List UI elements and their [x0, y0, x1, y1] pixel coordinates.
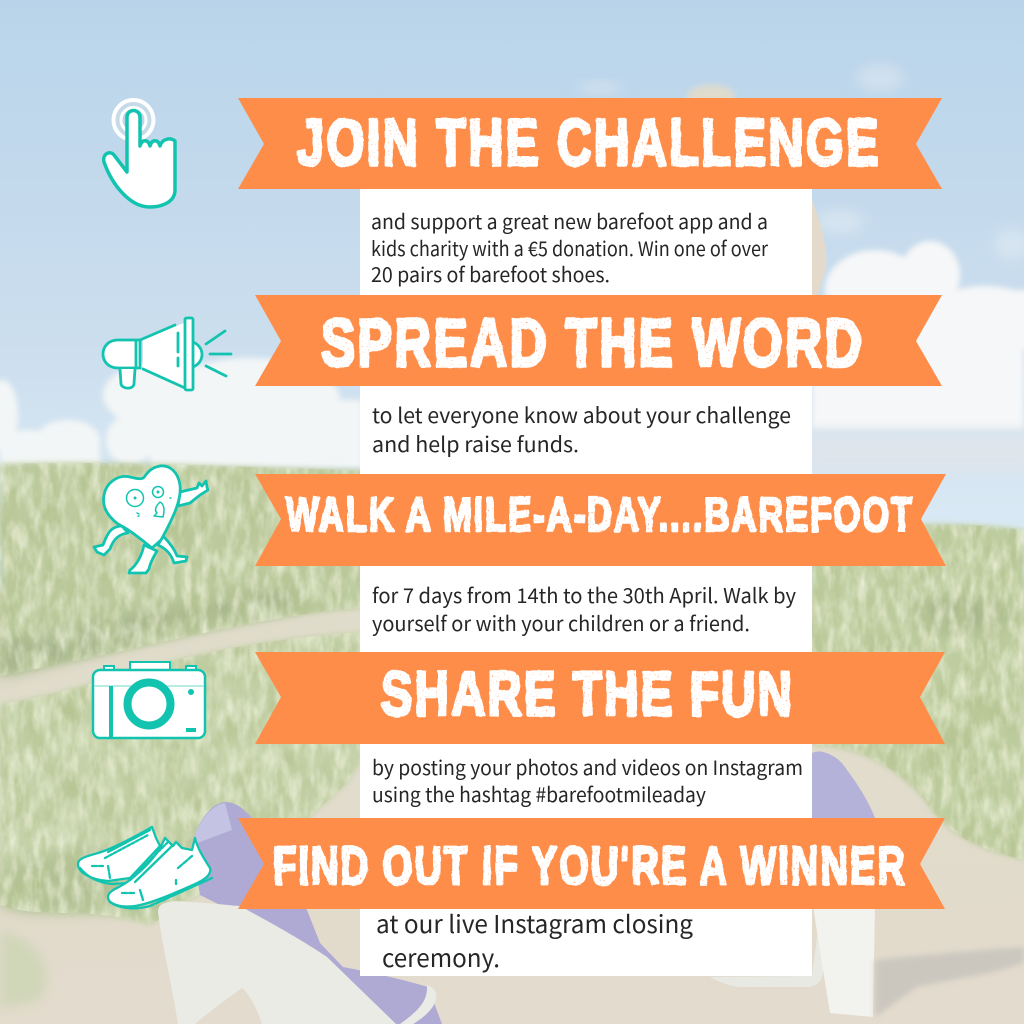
grass: lower left slope — [0, 632, 362, 925]
text: join description: and support a great new barefoot app and a — [371, 206, 768, 235]
icon: camera — [93, 662, 205, 738]
step 3: walk a mile a day — [94, 466, 946, 637]
text: winner description: at our live Instagram closing — [376, 906, 693, 941]
clouds — [0, 64, 1024, 472]
banner: walk a mile a day barefoot — [255, 474, 946, 566]
step 5: find out if you're a winner — [78, 818, 945, 975]
icon: sneakers — [78, 827, 212, 908]
icon: pointing hand — [104, 100, 175, 207]
text: share description — [372, 752, 803, 808]
text: winner description: ceremony. — [382, 940, 500, 975]
banner: share the fun: SHARE THE FUN — [381, 660, 794, 729]
banner: find out if you're a winner — [238, 818, 945, 909]
text: share description: using the hashtag #barefootmileaday — [372, 779, 707, 808]
text: join description — [371, 206, 768, 288]
text: walk description: yourself or with your children or a friend. — [372, 607, 750, 637]
grass: upper left and right hill — [0, 463, 362, 676]
left high heel — [158, 802, 442, 1024]
text: spread description — [372, 400, 791, 459]
text: spread description: to let everyone know about your challenge — [372, 400, 791, 430]
person: head and leg — [687, 85, 826, 295]
step 4: share the fun — [93, 652, 945, 808]
white text column — [360, 185, 812, 976]
banner: share the fun — [255, 652, 945, 744]
step 1: join the challenge — [104, 98, 942, 288]
sky — [0, 0, 1024, 560]
text: share description: by posting your photos and videos on Instagram — [372, 752, 803, 781]
text: walk description — [372, 579, 796, 637]
text: join description: 20 pairs of barefoot shoes. — [371, 259, 610, 288]
right high heel — [710, 751, 1024, 1017]
text: walk description: for 7 days from 14th to the 30th April. Walk by — [372, 579, 796, 609]
banner: spread the word: SPREAD THE WORD — [321, 305, 864, 381]
ground: sand — [0, 590, 1024, 1024]
step 2: spread the word — [103, 295, 942, 459]
banner: spread the word — [255, 295, 942, 386]
text: spread description: and help raise funds. — [372, 429, 579, 459]
banner: join the challenge — [238, 98, 942, 189]
icon: megaphone — [103, 318, 231, 390]
icon: walking heart — [94, 466, 208, 573]
text: winner description — [376, 906, 693, 975]
text: join description: kids charity with a €5 donation. Win one of over — [371, 233, 768, 262]
